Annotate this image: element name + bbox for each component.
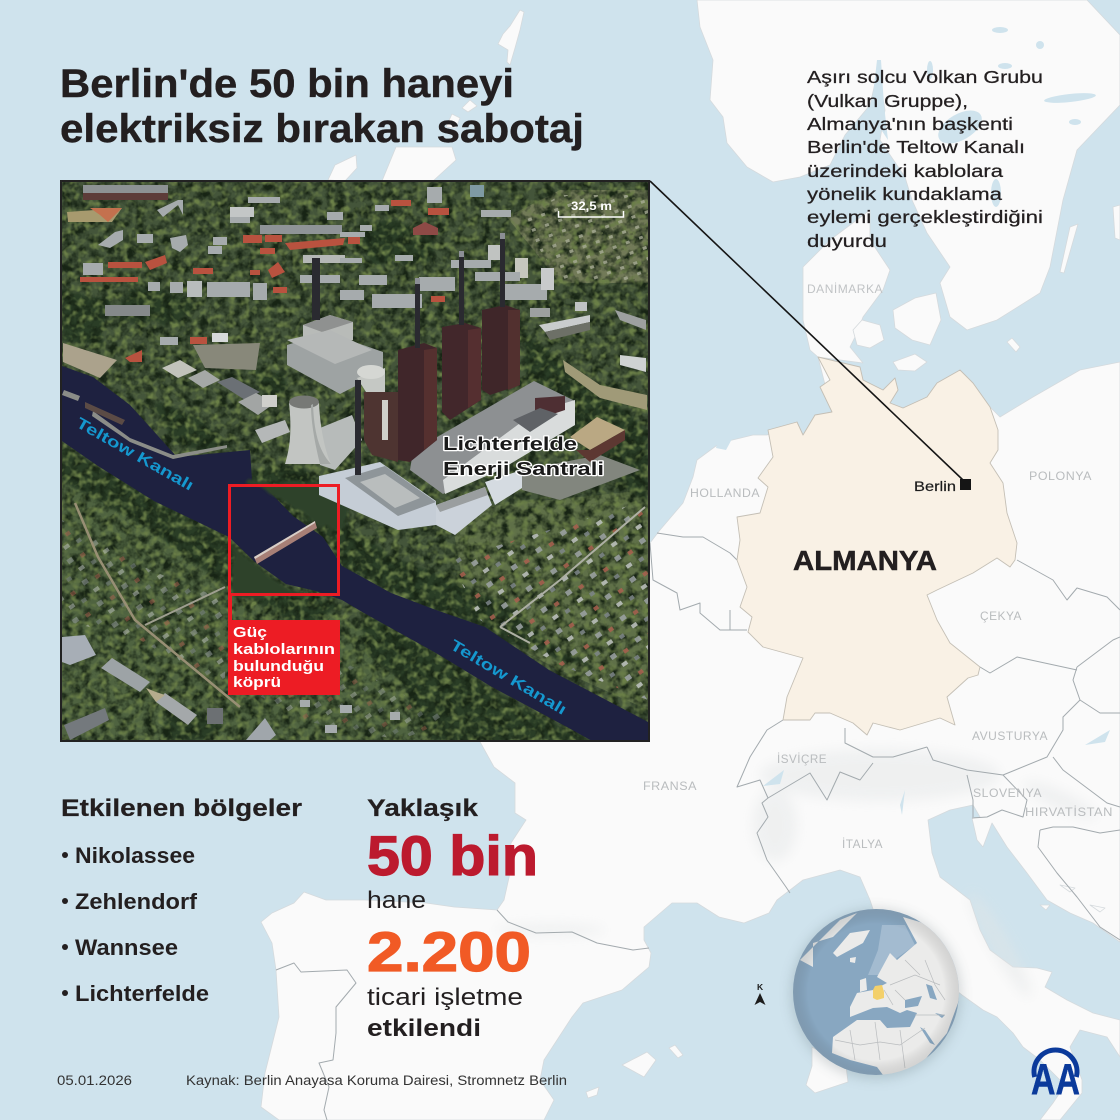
stats block: Yaklaşık — [367, 795, 478, 822]
map: country labels: POLONYA — [1029, 469, 1092, 483]
map: country labels: İTALYA — [842, 837, 883, 851]
stats block: etkilendi — [367, 1015, 481, 1042]
text block: description: üzerindeki kablolara — [807, 161, 1003, 181]
red callout: bridge with power cables: Güç — [233, 624, 267, 641]
logo: AA: AA — [1031, 1055, 1080, 1104]
stats block — [367, 795, 538, 1042]
text block: description — [807, 67, 1043, 251]
allotment textures — [520, 195, 648, 280]
panel: aerial photo of the power plant — [60, 180, 650, 742]
map: country labels: HIRVATİSTAN — [1025, 805, 1113, 819]
list: affected regions: Nikolassee — [75, 843, 195, 868]
text block: description: Almanya'nın başkenti — [807, 114, 1013, 134]
globe locator — [791, 909, 962, 1079]
heading: affected regions: Etkilenen bölgeler — [61, 795, 303, 822]
label: Lichterfelde Enerji Santrali: Lichterfelde — [443, 433, 577, 454]
map: country labels: AVUSTURYA — [972, 729, 1048, 743]
map: land masses — [261, 0, 1120, 1120]
red callout: bridge with power cables: köprü — [233, 674, 281, 691]
text block: description: Berlin'de Teltow Kanalı — [807, 137, 1025, 157]
source: Kaynak: Berlin Anayasa Koruma Dairesi, Stromnetz Berlin — [186, 1073, 567, 1088]
roads — [500, 507, 645, 627]
map: country borders — [276, 533, 1120, 1120]
text block: description: Aşırı solcu Volkan Grubu — [807, 67, 1043, 87]
stat: 50 bin: 50 bin — [367, 824, 538, 887]
marker: Berlin: Berlin — [914, 478, 956, 494]
title: Berlin'de 50 bin haneyi — [60, 62, 514, 106]
map label: ALMANYA: ALMANYA — [793, 545, 937, 576]
plant buildings — [285, 233, 640, 535]
marker: Berlin — [914, 478, 971, 494]
photo ground zones — [62, 182, 648, 740]
list: affected regions: Wannsee — [75, 935, 178, 960]
title — [60, 62, 584, 151]
tree masses — [62, 220, 648, 740]
label: Teltow Kanalı upper: Teltow Kanalı — [73, 415, 196, 494]
list: affected regions: Zehlendorf — [75, 889, 198, 914]
bridge — [254, 521, 317, 564]
icon: north arrow: K — [757, 982, 764, 992]
map: country labels — [643, 282, 1113, 851]
map: Germany highlighted — [737, 357, 1017, 735]
date: 05.01.2026 — [57, 1073, 132, 1088]
label: Lichterfelde Enerji Santrali — [443, 433, 604, 479]
red callout: bridge with power cables: kablolarının — [233, 641, 335, 658]
red callout: bridge with power cables: bulunduğu — [233, 658, 324, 675]
text block: description: yönelik kundaklama — [807, 184, 1002, 204]
red box trees — [232, 482, 345, 597]
sand areas — [63, 343, 117, 378]
red highlight around the bridge — [230, 486, 338, 594]
map: terrain shading — [495, 749, 1100, 1002]
label: Lichterfelde Enerji Santrali: Enerji Santrali — [443, 458, 604, 479]
list: affected regions — [62, 843, 209, 1006]
barges and pier — [62, 390, 227, 459]
stats block: hane — [367, 887, 426, 914]
map: country labels: ÇEKYA — [980, 609, 1022, 623]
title: elektriksiz bırakan sabotaj — [60, 107, 584, 151]
grey and white buildings — [62, 185, 646, 740]
stats block: ticari işletme — [367, 984, 523, 1011]
map: country labels: HOLLANDA — [690, 486, 760, 500]
icon: north arrow — [754, 982, 766, 1005]
list: affected regions: Lichterfelde — [75, 981, 209, 1006]
map: country labels: FRANSA — [643, 779, 697, 793]
map: country labels: SLOVENYA — [973, 786, 1042, 800]
stat: 2.200: 2.200 — [367, 920, 531, 983]
text block: description: duyurdu — [807, 231, 887, 251]
map: lakes — [716, 27, 1110, 815]
red callout: bridge with power cables — [228, 596, 340, 695]
map: country labels: DANİMARKA — [807, 282, 883, 296]
scale bar: 32,5 m — [571, 199, 612, 213]
scale bar — [558, 199, 624, 217]
canal — [62, 366, 650, 742]
map: country labels: İSVİÇRE — [777, 752, 827, 766]
red roofs — [67, 200, 449, 362]
callout line from photo to Berlin — [650, 181, 963, 480]
label: Teltow Kanalı lower: Teltow Kanalı — [447, 637, 569, 719]
text block: description: eylemi gerçekleştirdiğini — [807, 207, 1043, 227]
text block: description: (Vulkan Gruppe), — [807, 91, 968, 111]
